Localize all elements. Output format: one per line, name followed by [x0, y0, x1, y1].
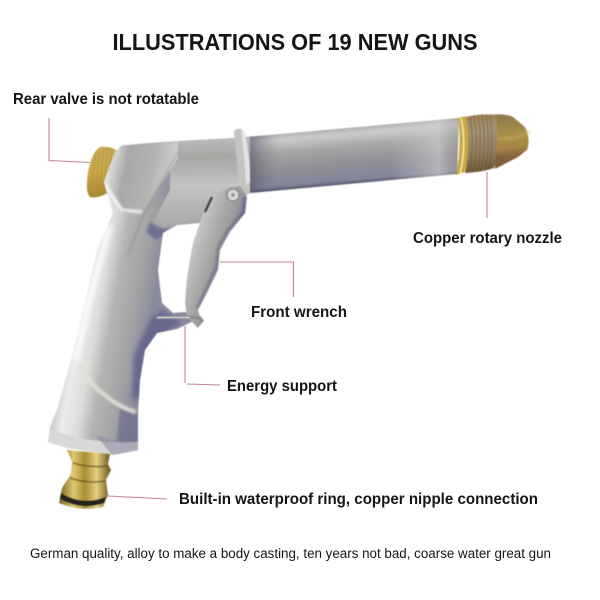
leader line: waterproof ring [108, 496, 167, 499]
handle highlight [76, 225, 110, 360]
icon: brass rear valve [87, 147, 116, 197]
upper receiver shading [150, 136, 250, 228]
label: waterproof ring [108, 491, 538, 508]
caption: German quality, alloy to make a body casting, ten years not bad, coarse water great gun [30, 546, 551, 561]
label text: front wrench: Front wrench [251, 304, 347, 321]
icon: flange ring [234, 129, 250, 186]
label text: energy support: Energy support [227, 378, 337, 395]
leader line: energy support [185, 326, 220, 385]
spray gun illustration [47, 114, 530, 509]
trigger pin [227, 189, 239, 201]
label: front wrench [220, 262, 347, 321]
leader line: nozzle [486, 172, 488, 218]
icon: metal tube [246, 118, 459, 193]
icon: pistol body [47, 136, 250, 456]
icon: brass ring [456, 116, 469, 175]
icon: energy support wire [157, 317, 203, 322]
leader line: rear valve [49, 118, 90, 162]
title: ILLUSTRATIONS OF 19 NEW GUNS [112, 29, 478, 55]
top plate [105, 141, 178, 213]
label: energy support [185, 326, 337, 395]
icon: brass nipple connector [59, 450, 111, 509]
label text: rear valve: Rear valve is not rotatable [13, 91, 199, 108]
base collar [49, 430, 138, 455]
icon: trigger lever [185, 186, 247, 328]
icon: knurled nozzle collar [465, 114, 497, 173]
label: rear valve [13, 91, 199, 162]
label text: nozzle: Copper rotary nozzle [413, 230, 562, 247]
icon: copper nozzle tip [490, 114, 529, 169]
leader line: front wrench [220, 262, 294, 297]
grip band [80, 365, 136, 412]
label text: waterproof ring: Built-in waterproof ring, copper nipple connection [179, 491, 538, 508]
dark grip shading [146, 222, 168, 240]
